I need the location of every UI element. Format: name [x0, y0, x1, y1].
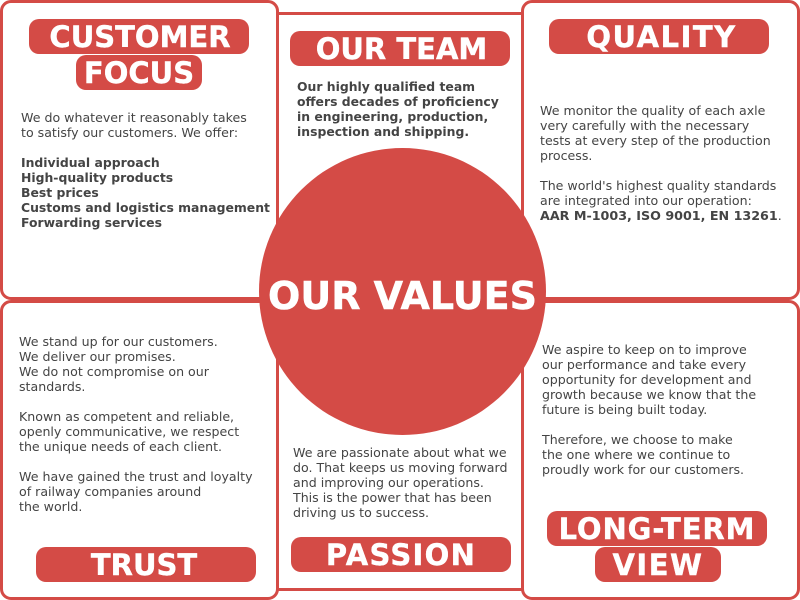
panel: middle column: [270, 12, 530, 591]
heading: passion: [291, 537, 511, 572]
heading: trust: TRUST: [91, 548, 197, 582]
heading: quality: [549, 19, 769, 54]
panel: quality: [521, 0, 800, 300]
text: long-term view: We aspire to keep on to improve our performance and take every opportunity for development and growth because we know that the future is being built today. Therefore, we choose to make the one where we continue to proudly work for our customers.: [542, 342, 756, 477]
panel: trust: [0, 300, 279, 600]
text: quality: We monitor the quality of each axle very carefully with the necessary tests at every step of the production process. The world's highest quality standards are integrated into our operation: AAR M-1003, ISO 9001, EN 13261.: [540, 103, 782, 223]
panel: long-term view: [521, 300, 800, 600]
heading: our team: OUR TEAM: [316, 32, 487, 66]
heading: long-term: LONG-TERM: [559, 512, 755, 546]
central circle: our values: OUR VALUES: [268, 274, 537, 318]
heading: passion: PASSION: [326, 538, 476, 572]
text: our team: Our highly qualified team offers decades of proficiency in engineering, production, inspection and shipping.: [297, 79, 499, 139]
heading: focus: FOCUS: [84, 56, 194, 90]
heading: quality: QUALITY: [586, 20, 737, 54]
heading: view: VIEW: [612, 548, 704, 582]
text: customer focus: We do whatever it reasonably takes to satisfy our customers. We offer: Individual approach High-quality products Best prices Customs and logistics management Forwarding services: [21, 110, 270, 230]
text: trust: We stand up for our customers. We deliver our promises. We do not compromise on our standards. Known as competent and reliable, openly communicative, we respect the unique needs of each client. We have gained the trust and loyalty of railway companies around the world.: [19, 334, 253, 514]
heading: customer: CUSTOMER: [49, 20, 231, 54]
heading: trust: [36, 547, 256, 582]
central circle: our values: [259, 148, 546, 435]
panel: customer focus: [0, 0, 279, 300]
text: passion: We are passionate about what we do. That keeps us moving forward and improving our operations. This is the power that has been driving us to success.: [293, 445, 507, 520]
